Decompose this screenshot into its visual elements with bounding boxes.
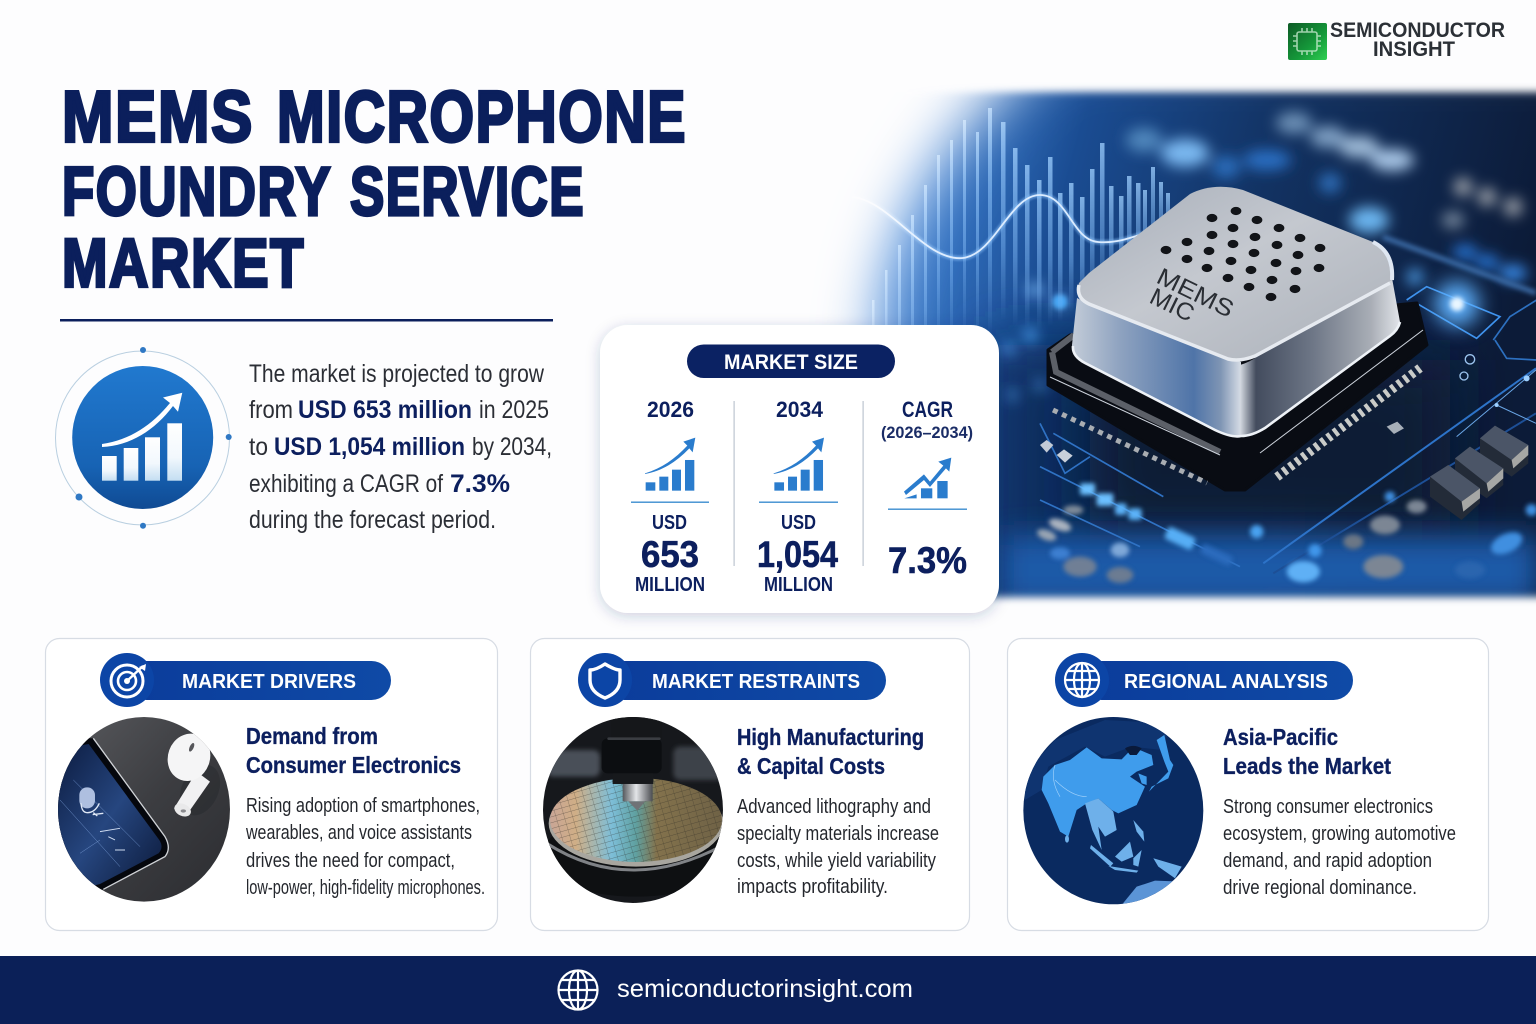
column: 2034: MILLION — [764, 574, 833, 596]
market summary paragraph: USD 1,054 million — [274, 433, 465, 461]
market summary paragraph: USD 653 million — [298, 396, 472, 424]
column: 2026: MILLION — [635, 574, 705, 596]
market size heading pill: MARKET SIZE — [724, 350, 858, 374]
column: CAGR: (2026–2034) — [881, 423, 973, 442]
market drivers header — [100, 653, 391, 707]
restraints body text — [737, 796, 939, 898]
market summary paragraph: during the forecast period. — [249, 506, 496, 534]
market summary paragraph: 7.3% — [450, 470, 510, 498]
market restraints header — [578, 653, 886, 707]
restraints heading — [737, 724, 924, 779]
drivers body text: drives the need for compact, — [246, 850, 455, 872]
photo: phone and earbud — [53, 713, 233, 903]
drivers body text: Rising adoption of smartphones, — [246, 795, 480, 817]
panel: regional analysis — [1008, 638, 1488, 930]
market summary paragraph: in 2025 — [479, 396, 549, 424]
title: MICROPHONE — [277, 78, 687, 158]
surface mount components — [1040, 355, 1530, 520]
column: 2026: 653 — [641, 534, 699, 575]
footer bar: semiconductorinsight.com — [617, 975, 913, 1003]
regional analysis header — [1055, 653, 1353, 707]
market size heading pill — [687, 344, 895, 378]
sound waveform — [852, 195, 1151, 258]
regional body text: demand, and rapid adoption — [1223, 850, 1432, 872]
photo: silicon wafer and tool — [539, 715, 733, 905]
title: SERVICE — [350, 153, 585, 230]
market summary paragraph: by 2034, — [472, 433, 552, 461]
panel: market size — [600, 325, 999, 613]
drivers heading: Consumer Electronics — [246, 752, 461, 778]
market summary paragraph — [249, 360, 552, 534]
chip metal lid — [1072, 187, 1400, 436]
footer bar — [0, 956, 1536, 1024]
restraints heading: & Capital Costs — [737, 753, 885, 779]
blurred board components, lower area — [1036, 294, 1536, 583]
regional body text — [1223, 796, 1456, 899]
panel: market restraints — [530, 638, 970, 930]
chip package base — [1048, 303, 1427, 490]
column: 2034 — [757, 397, 839, 596]
column: CAGR — [881, 397, 973, 581]
drivers body text: wearables, and voice assistants — [245, 822, 472, 844]
microphone port holes — [1161, 207, 1325, 301]
chip engraved label: MEMS — [1152, 263, 1238, 323]
market summary paragraph: to — [249, 433, 268, 461]
regional body text: ecosystem, growing automotive — [1223, 823, 1456, 845]
column: 2026: USD — [652, 512, 687, 534]
icon: globe — [558, 970, 598, 1010]
restraints body text: costs, while yield variability — [737, 850, 936, 872]
column: CAGR: CAGR — [902, 397, 953, 422]
circuit glow — [1435, 282, 1479, 326]
regional heading — [1223, 724, 1391, 779]
market drivers header: MARKET DRIVERS — [182, 670, 356, 693]
market summary paragraph: exhibiting a CAGR of — [249, 470, 443, 498]
market summary paragraph: The market is projected to grow — [249, 360, 545, 388]
regional analysis header: REGIONAL ANALYSIS — [1124, 670, 1328, 693]
drivers body text: low-power, high-fidelity microphones. — [246, 877, 485, 899]
glowing circuit traces, right side — [1040, 287, 1536, 573]
regional heading: Leads the Market — [1223, 753, 1391, 779]
regional body text: drive regional dominance. — [1223, 877, 1417, 899]
drivers heading: Demand from — [246, 723, 378, 749]
logo: Semiconductor Insight: INSIGHT — [1373, 38, 1455, 61]
drivers heading — [246, 723, 461, 778]
panel: market drivers — [46, 638, 498, 930]
logo: Semiconductor Insight — [1288, 19, 1505, 61]
logo: Semiconductor Insight: SEMICONDUCTOR — [1330, 19, 1505, 42]
title — [62, 78, 687, 302]
column: 2034: 2034 — [776, 397, 824, 422]
icon: growth chart in circle — [56, 347, 232, 529]
title: FOUNDRY — [62, 153, 332, 230]
title: MEMS — [62, 78, 254, 158]
data bars behind waveform — [872, 108, 1170, 326]
restraints body text: specialty materials increase — [737, 823, 939, 845]
restraints body text: impacts profitability. — [737, 876, 888, 898]
chip engraved label: MIC — [1145, 283, 1199, 328]
column: 2026 — [631, 397, 709, 596]
market summary paragraph: from — [249, 396, 293, 424]
regional heading: Asia-Pacific — [1223, 724, 1338, 750]
regional body text: Strong consumer electronics — [1223, 796, 1433, 818]
drivers body text — [245, 795, 485, 899]
restraints body text: Advanced lithography and — [737, 796, 931, 818]
column: 2034: 1,054 — [757, 534, 839, 575]
column: 2034: USD — [781, 512, 816, 534]
column: 2026: 2026 — [647, 397, 694, 422]
restraints heading: High Manufacturing — [737, 724, 924, 750]
market restraints header: MARKET RESTRAINTS — [652, 670, 860, 693]
hero image: MEMS microphone chip on circuit board — [834, 85, 1536, 604]
column: CAGR: 7.3% — [888, 540, 967, 581]
title: MARKET — [62, 224, 305, 302]
map: Asia-Pacific — [1023, 717, 1203, 907]
